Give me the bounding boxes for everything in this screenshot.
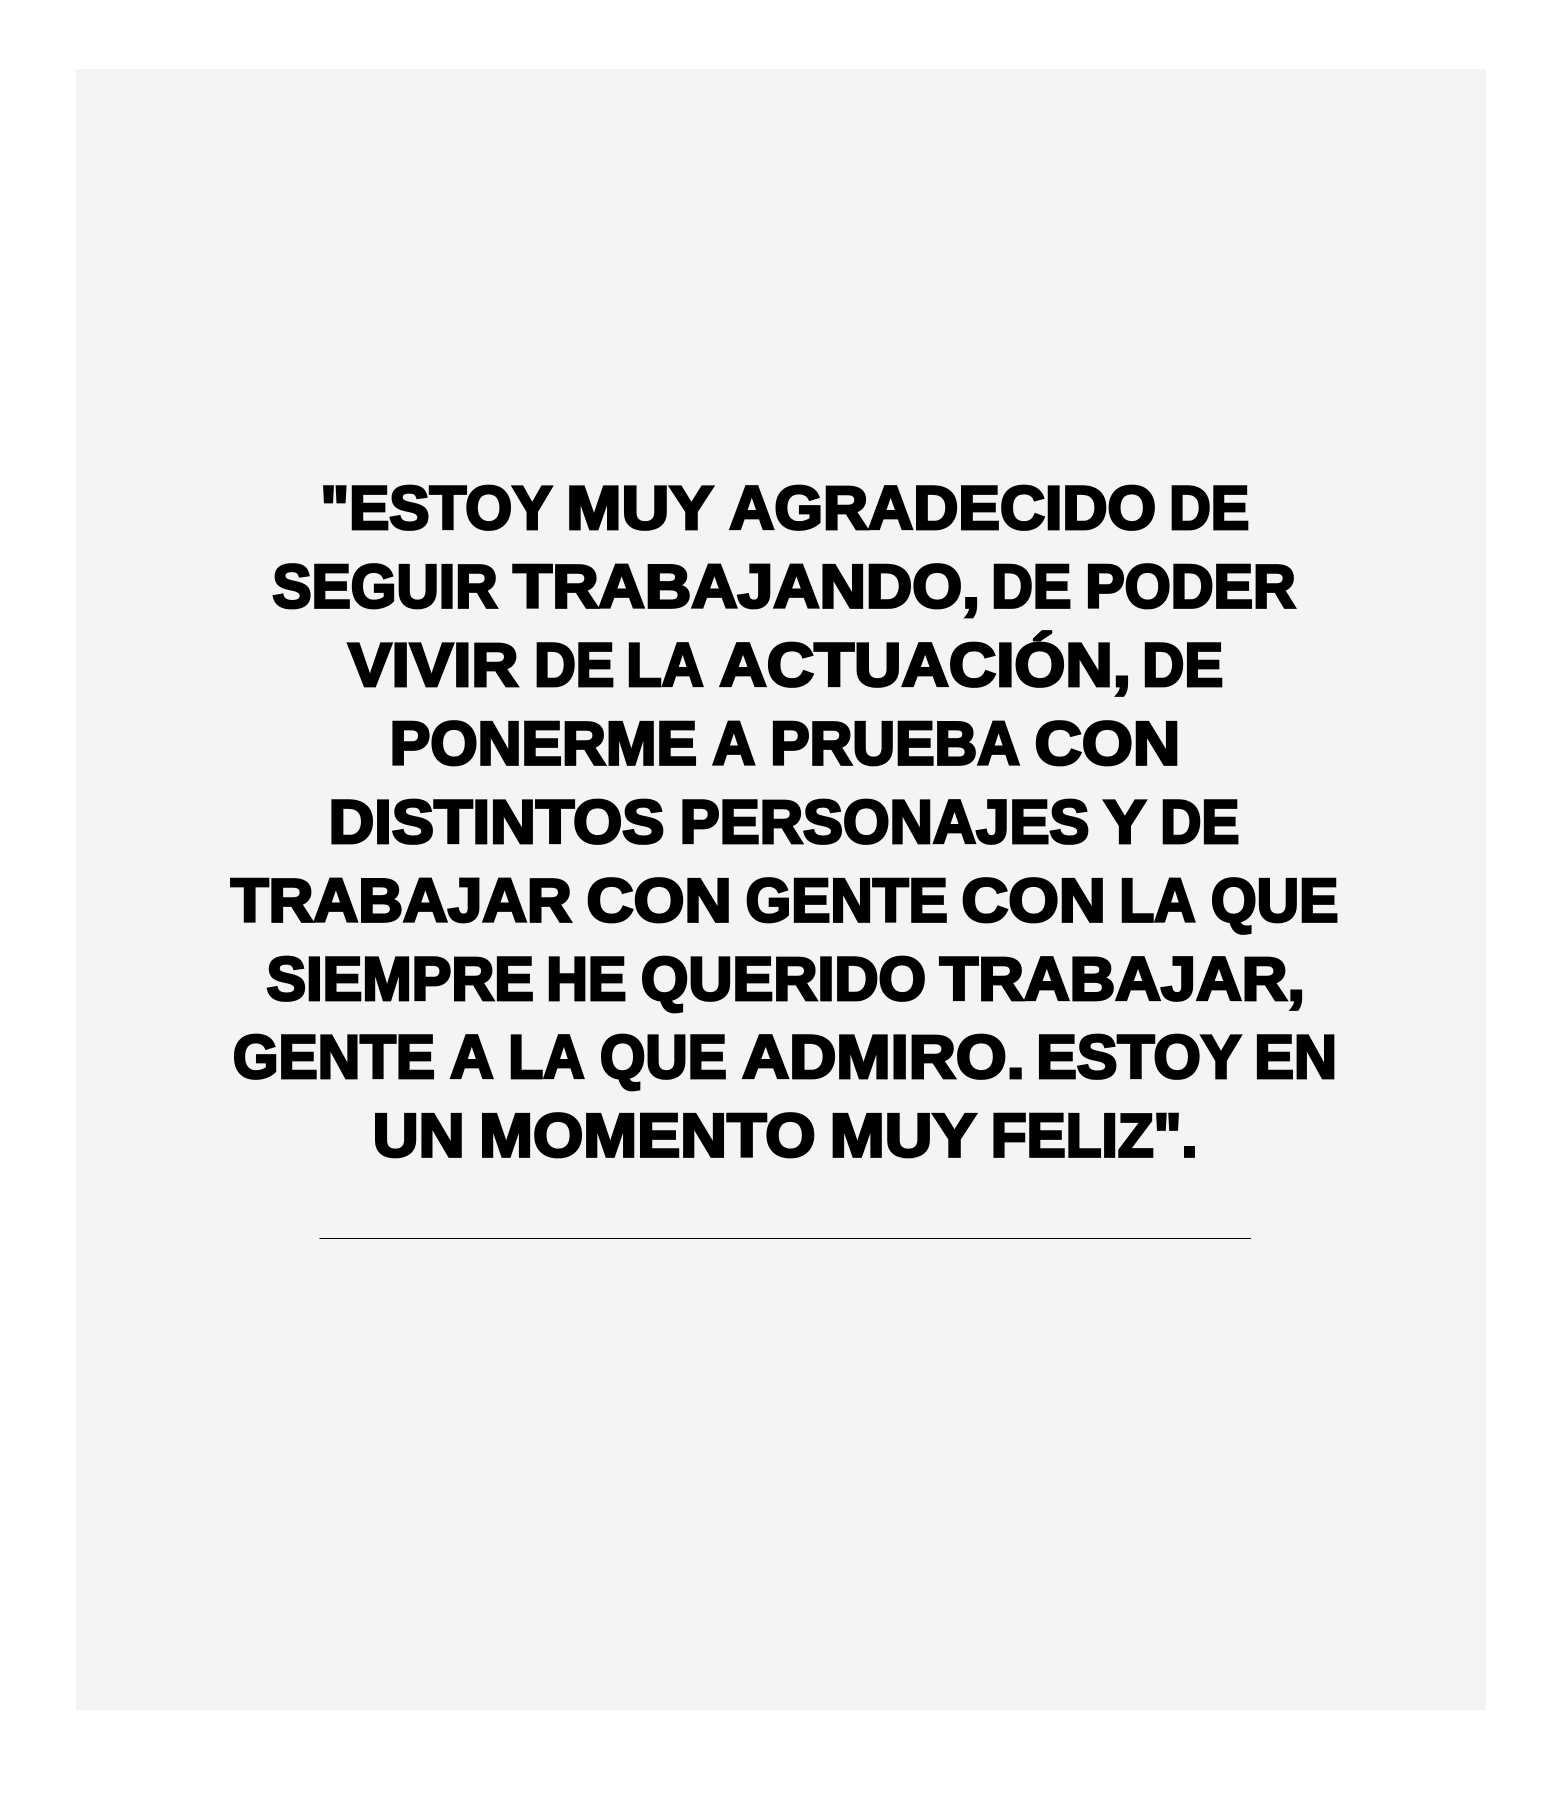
quote line 9: UN — [373, 1102, 465, 1171]
quote line 4: CON — [1035, 710, 1180, 779]
quote line 9: MUY — [830, 1102, 976, 1171]
quote line 9: FELIZ". — [991, 1102, 1198, 1171]
quote line 8: EN — [1254, 1023, 1337, 1092]
quote line 6: TRABAJAR — [231, 867, 572, 936]
quote line 6 — [231, 867, 1338, 936]
quote line 1: MUY — [566, 474, 714, 543]
quote text — [231, 474, 1338, 1171]
quote line 7 — [266, 945, 1305, 1014]
quote line 3: DE — [534, 631, 614, 700]
quote line 8 — [233, 1023, 1337, 1092]
quote line 5: Y — [1104, 788, 1146, 857]
quote line 6: LA — [1119, 867, 1196, 936]
quote line 3: VIVIR — [348, 631, 518, 700]
quote line 7: SIEMPRE — [266, 945, 534, 1014]
quote line 9 — [373, 1102, 1198, 1171]
quote line 2: DE — [991, 553, 1071, 622]
quote line 1: "ESTOY — [320, 474, 552, 543]
quote line 3: DE — [1142, 631, 1223, 700]
quote line 8: ESTOY — [1036, 1023, 1241, 1092]
quote line 5: DISTINTOS — [329, 788, 664, 857]
quote line 5 — [329, 788, 1239, 857]
quote line 8: ADMIRO. — [742, 1023, 1025, 1092]
quote line 7: TRABAJAR, — [940, 945, 1305, 1014]
quote line 2 — [272, 553, 1296, 622]
quote line 8: QUE — [600, 1023, 727, 1092]
quote line 6: CON — [586, 867, 732, 936]
quote line 3: LA — [626, 631, 704, 700]
quote line 8: A — [450, 1023, 494, 1092]
quote line 6: CON — [962, 867, 1106, 936]
quote line 5: PERSONAJES — [680, 788, 1089, 857]
quote line 4 — [390, 710, 1180, 779]
divider line — [320, 1238, 1251, 1239]
quote line 4: PRUEBA — [770, 710, 1020, 779]
quote line 8: GENTE — [233, 1023, 435, 1092]
quote line 3: ACTUACIÓN, — [719, 631, 1131, 700]
quote line 2: TRABAJANDO, — [513, 553, 980, 622]
quote line 6: QUE — [1211, 867, 1338, 936]
quote line 2: SEGUIR — [272, 553, 498, 622]
quote line 6: GENTE — [746, 867, 948, 936]
quote line 5: DE — [1160, 788, 1239, 857]
quote line 9: MOMENTO — [479, 1102, 816, 1171]
quote line 3 — [348, 631, 1223, 700]
quote line 1: AGRADECIDO — [729, 474, 1156, 543]
quote line 4: PONERME — [390, 710, 697, 779]
quote line 8: LA — [508, 1023, 585, 1092]
quote line 4: A — [712, 710, 755, 779]
quote line 7: QUERIDO — [641, 945, 926, 1014]
quote line 2: PODER — [1085, 553, 1296, 622]
quote line 1 — [320, 474, 1249, 543]
quote line 7: HE — [546, 945, 626, 1014]
quote line 1: DE — [1169, 474, 1249, 543]
